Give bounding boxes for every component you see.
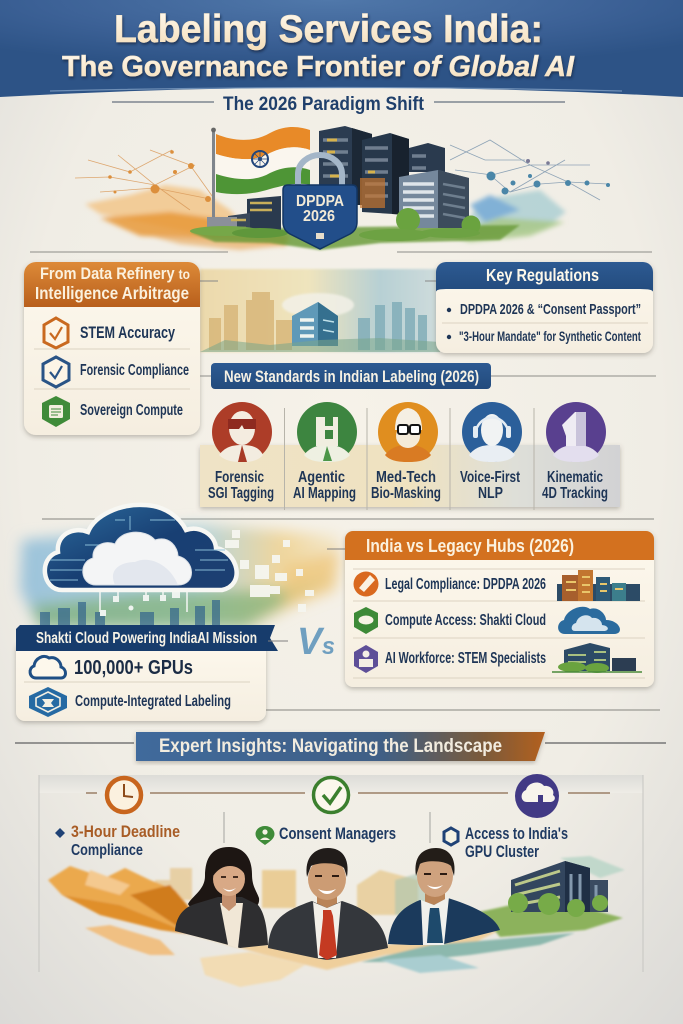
- text: 3-hour deadline: [55, 822, 180, 859]
- panel: India vs Legacy Hubs: India vs Legacy Hubs (2026): [366, 535, 574, 556]
- labels: 4D Tracking: [542, 485, 608, 502]
- icon: med-tech avatar: [378, 402, 438, 462]
- light building: [399, 170, 469, 228]
- icon: check: [314, 778, 348, 812]
- icon: agentic AI avatar: [297, 402, 357, 462]
- row: legal compliance: Legal Compliance: DPDPA 2026: [385, 576, 546, 593]
- row: AI workforce: AI Workforce: STEM Specialists: [385, 650, 546, 667]
- panel: From Data Refinery to Intelligence Arbitrage: From Data Refinery to: [40, 264, 190, 283]
- standards row: [200, 402, 620, 510]
- divider lines: [30, 251, 652, 253]
- dark cloud: [45, 505, 237, 590]
- title: The Governance Frontier of Global AI: [62, 51, 575, 83]
- title: [62, 8, 575, 83]
- DPDPA lock: DPDPA: [296, 193, 344, 210]
- icon: clock: [107, 778, 141, 812]
- floating data squares: [225, 530, 314, 612]
- panel: Shakti Cloud: 100,000+ GPUs: [74, 657, 193, 679]
- text: access to GPU cluster: [444, 824, 568, 861]
- person: woman: [175, 847, 268, 948]
- building: [511, 861, 608, 912]
- text: consent managers: Consent Managers: [279, 824, 396, 843]
- row: legal compliance: [354, 570, 640, 601]
- section heading: Expert Insights: [15, 732, 666, 761]
- divider line: [266, 709, 660, 711]
- person: man centre: [268, 848, 388, 960]
- labels: SGI Tagging: [208, 485, 274, 502]
- panel: Expert insights: [39, 774, 643, 987]
- header banner: [0, 0, 683, 97]
- flagpole: [212, 131, 215, 217]
- divider line: [42, 518, 654, 520]
- panel: Shakti Cloud: [16, 625, 278, 721]
- flag: [216, 127, 310, 194]
- ground: [190, 225, 520, 250]
- trees: [190, 208, 480, 241]
- labels: AI Mapping: [293, 485, 356, 502]
- vs mark: Vs: [297, 621, 335, 663]
- DPDPA lock: 2026: [303, 208, 335, 225]
- icon: sovereign compute hexagon: [42, 396, 70, 427]
- section heading: New Standards in Indian Labeling (2026): [200, 363, 656, 389]
- panel: From Data Refinery to Intelligence Arbitrage: STEM Accuracy: [80, 323, 175, 342]
- text: 3-hour deadline: Compliance: [71, 842, 143, 859]
- icon: STEM accuracy hexagon: [44, 318, 68, 348]
- DPDPA lock: [283, 155, 357, 249]
- panel: Shakti Cloud: Shakti Cloud Powering IndiaAI Mission: [36, 630, 257, 647]
- row: AI workforce: [354, 643, 642, 673]
- central building: [292, 302, 338, 346]
- hero illustration: flag, lock and data centre: [75, 126, 610, 250]
- text: 3-hour deadline: 3-Hour Deadline: [71, 822, 180, 841]
- title: Labeling Services India:: [114, 8, 543, 51]
- server towers: [319, 126, 445, 215]
- subtitle: The 2026 Paradigm Shift: The 2026 Paradigm Shift: [223, 94, 425, 115]
- icon: forensic SGI avatar: [212, 402, 272, 462]
- text: consent managers: [256, 824, 396, 845]
- icon: voice-first avatar: [462, 402, 522, 462]
- labels: Voice-First: [460, 469, 520, 486]
- wash behind cloud: [20, 524, 340, 628]
- panel: From Data Refinery to Intelligence Arbitrage: Forensic Compliance: [80, 362, 189, 379]
- text: access to GPU cluster: GPU Cluster: [465, 842, 539, 861]
- panel: Key Regulations: [436, 262, 653, 353]
- terrain washes: [85, 185, 566, 250]
- text: access to GPU cluster: Access to India's: [465, 824, 568, 843]
- vs mark: [268, 621, 335, 663]
- cloud illustration: [20, 505, 340, 628]
- section heading: New Standards in Indian Labeling (2026): New Standards in Indian Labeling (2026): [224, 368, 479, 386]
- panel: Shakti Cloud: Compute-Integrated Labeling: [75, 693, 231, 710]
- labels: Med-Tech: [376, 469, 436, 486]
- labels: Bio-Masking: [371, 485, 441, 502]
- network right: [450, 140, 608, 200]
- timeline: [86, 792, 610, 794]
- icon: kinematic avatar: [546, 402, 606, 462]
- panel: From Data Refinery to Intelligence Arbitrage: Sovereign Compute: [80, 402, 183, 419]
- trees: [508, 893, 608, 917]
- panel: From Data Refinery to Intelligence Arbitrage: [24, 262, 200, 435]
- panel: From Data Refinery to Intelligence Arbitrage: Intelligence Arbitrage: [35, 283, 189, 303]
- panel: India vs Legacy Hubs: [327, 531, 654, 687]
- labels: [208, 469, 608, 502]
- data drips: [100, 586, 187, 612]
- icon: cloud: [30, 656, 66, 678]
- section heading: Expert Insights: Expert Insights: Navigating the Landscape: [159, 736, 502, 757]
- icon: cloud circle: [515, 774, 559, 818]
- icon: compute hexagon: [29, 687, 67, 717]
- small servers: [207, 196, 281, 234]
- labels: Kinematic: [547, 469, 603, 486]
- city band illustration: [200, 269, 440, 352]
- row: compute access: [354, 607, 620, 634]
- labels: NLP: [478, 485, 503, 502]
- row: compute access: Compute Access: Shakti Cloud: [385, 612, 546, 629]
- network left: [75, 150, 215, 210]
- labels: Forensic: [215, 469, 264, 486]
- landscape illustration: [48, 856, 625, 987]
- labels: Agentic: [298, 469, 345, 486]
- icon: forensic compliance hexagon: [43, 357, 69, 387]
- panel: Key Regulations: Key Regulations: [486, 265, 599, 285]
- white cloud: [83, 532, 192, 585]
- person: man right: [388, 848, 500, 945]
